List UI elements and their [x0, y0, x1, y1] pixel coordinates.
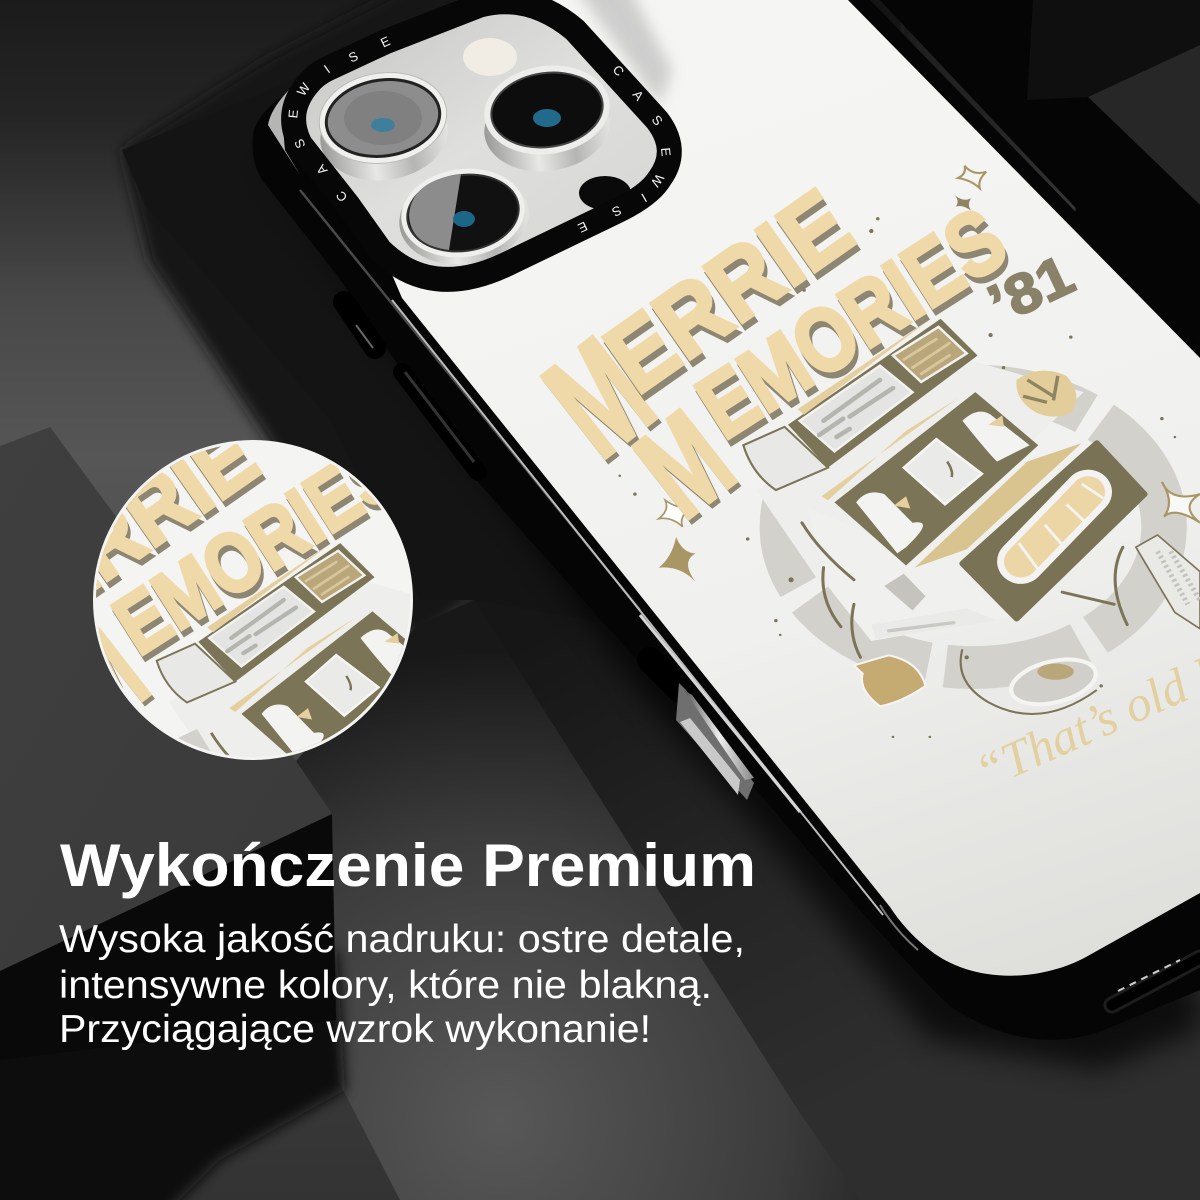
- lens: bottom: [393, 161, 535, 273]
- background: soft shadow under lower left block: [0, 950, 345, 1200]
- soft shading by camera: [570, 0, 672, 105]
- artwork title: MERRIE: [539, 186, 861, 464]
- background: lit diagonal band: [296, 600, 860, 1200]
- zoom detail circle: [93, 440, 413, 760]
- magnified title line two: EMORIES: [98, 421, 416, 672]
- artwork title: MEMORIES: EMORIES: [681, 189, 1023, 458]
- case bright side reflection: [640, 615, 800, 812]
- artwork title: MEMORIES: M: [611, 384, 758, 544]
- background: top right block: [1027, 0, 1200, 340]
- charging port: [1112, 958, 1200, 1005]
- background: surface beside the phone: [474, 600, 1200, 1200]
- camera island: [268, 2, 674, 279]
- phone white back: [390, 0, 1200, 976]
- artwork title: MERRIE: M: [519, 311, 684, 491]
- magnified title line two: M: [37, 608, 174, 757]
- artwork title: MEMORIES: [630, 210, 1008, 525]
- silver side button: [650, 660, 754, 800]
- body line three: Przyciągające wzrok wykonanie!: [59, 1008, 651, 1051]
- artwork illustration: VHS cassette: [618, 166, 1200, 738]
- body line one: Wysoka jakość nadruku: ostre detale,: [59, 918, 745, 961]
- upper side button: [344, 302, 375, 348]
- background: central block soft left shadow: [122, 0, 900, 1113]
- microphone hole: [579, 176, 631, 210]
- background: lower left block front: [0, 814, 336, 1060]
- background: central block top face: [122, 0, 900, 1113]
- phone black case frame: [252, 0, 1200, 1040]
- body text: [59, 918, 745, 1051]
- phone: [252, 0, 1200, 1070]
- flash: [463, 38, 517, 76]
- artwork title: MERRIE: ERRIE: [589, 174, 873, 419]
- lens: top right: [478, 58, 616, 179]
- brand lettering on ring, left: CASEWISE: [285, 33, 393, 205]
- magnified title line two: [98, 464, 382, 706]
- printed artwork on phone back: [516, 0, 1200, 800]
- artwork title: MEMORIES: M: [614, 388, 761, 548]
- case side highlight line: [300, 190, 640, 610]
- artwork year: ’81: [978, 242, 1083, 336]
- magnified cassette: [156, 543, 405, 756]
- lens: top left: [313, 65, 454, 188]
- heading: Wykończenie Premium: [60, 832, 756, 899]
- body line two: intensywne kolory, które nie blakną.: [59, 964, 712, 1007]
- volume button: [402, 372, 478, 472]
- artwork title: MERRIE: ERRIE: [586, 168, 870, 413]
- phone case shadow: [254, 153, 1200, 1070]
- magnified title line one: ERRIE: [14, 409, 278, 637]
- case inner highlight: [392, 300, 883, 915]
- circle base: [93, 440, 413, 760]
- background: top right dark area: [880, 0, 1200, 340]
- black ring band: [294, 2, 669, 279]
- island side window: [268, 66, 316, 175]
- case lower corner highlight: [880, 905, 918, 950]
- background: lower left block top: [0, 427, 332, 971]
- magnified title line one: ERRIE: [11, 404, 275, 631]
- artwork title: MERRIE: M: [516, 307, 681, 487]
- magnified title line one: [96, 444, 266, 598]
- magnified artwork: [96, 444, 405, 756]
- brand lettering on ring, right: CASEWISE: [575, 62, 674, 236]
- magnified title line two: EMORIES: [101, 427, 419, 678]
- camera glass: [294, 2, 669, 279]
- artwork title: MEMORIES: EMORIES: [684, 195, 1026, 464]
- magnified title line two: M: [34, 604, 171, 753]
